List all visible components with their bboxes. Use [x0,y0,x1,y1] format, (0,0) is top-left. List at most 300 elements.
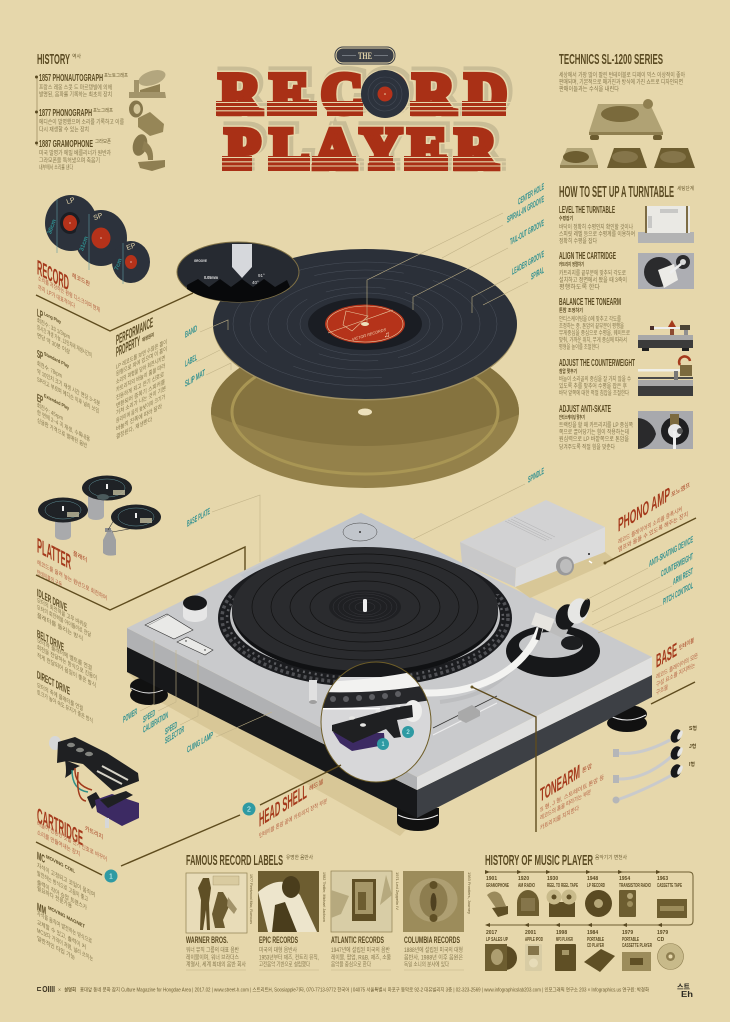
item: lp sales up: LP SALES UP [486,937,508,943]
item: cd: 1979 [657,930,668,936]
step: balance the tonearm: 맞춰, 가까운 위치, 무게 중심에 따라서 [559,336,627,344]
icon: phonograph [129,100,164,136]
illustration: turntable [127,513,652,836]
text: performance property: 원형으로 파여 있으며 이 홈이 [116,344,167,378]
vinyl record [213,249,517,400]
step: level the turntable [559,205,694,245]
footer: × [58,988,61,994]
icon: small turntable silver [560,148,598,168]
magnifier: headshell detail: 2 [406,730,410,736]
item: lp sales up [485,930,517,971]
labels: record parts: SLIP MAT [185,368,205,390]
item: cassette tape: CASSETTE TAPE [657,883,682,889]
text: LP [37,307,92,360]
text: MC: 출력이 작아 승압 트랜스가 [37,877,87,912]
magnifier: groove: 0.05mm [204,275,218,280]
tonearm base [506,621,600,677]
icon: large SL-1200 [589,99,663,140]
footer logo right [677,983,693,999]
item: cd: CD [657,937,665,943]
icon: small turntable black 2 [654,148,695,168]
tonearm [378,595,592,702]
label: atlantic records: 1971 Led Zeppelin IV [395,872,399,910]
text: SP: SP라고 부르며 에디슨 이후 널리 쓰임 [37,374,99,415]
label: warner bros: 레이블이며, 워너 브라더스 [186,954,239,962]
panel: tonearm text: S 형, J 형, 스트레이트 톤암 등 [540,772,604,814]
history entry: 1857 [39,72,128,98]
text: MC: 필요하다 전문가용 [37,883,72,910]
step: adjust anti-skate: 안티스케이팅 맞추기 [559,414,585,421]
history entry: 1887: 미국 발명가 에밀 베를리너가 원반과 [39,149,111,157]
history entry: 1877: 1877 PHONOGRAPH [39,108,92,119]
panel: history: 역사 [72,53,81,60]
item: cassette tape: 1963 [657,876,668,882]
panel: tonearm text: 카트리지를 지지한다 [540,803,579,832]
panel: phono amp text: 레코드 플레이어의 소리를 증폭시켜 [618,504,682,546]
step: align the cartridge: ALIGN THE CARTRIDGE [559,251,616,262]
text: MM: 자석을 움직여 발전하는 방식으로 [37,908,92,946]
marker 2 [242,802,256,816]
labels: record parts: LABEL [185,352,197,370]
panel: history [35,51,167,172]
label: atlantic records: 1947년에 설립된 미국의 음반 [331,946,390,954]
item: apple ipod: 2001 [525,930,536,936]
panel: technics: 판매이들과는 수식을 내린다 [559,85,619,93]
title word: record: RECORD [219,61,507,126]
panel: base text: 구성 요소를 지지하는 [656,660,695,689]
icon: LP disc: LP [66,197,76,206]
text: EP: 한 면에 2~4 곡 재생, 수록내용 [37,407,90,443]
icon: SP disc: SP [93,212,104,222]
label: atlantic records: ATLANTIC RECORDS [331,935,384,946]
text: LP: LP [37,307,43,322]
step: adjust anti-skate: ADJUST ANTI-SKATE [559,404,611,415]
footer credits: 홍대앞 동네 문화 잡지 Culture Magazine for Hongdae Area | 2017.02 | www.street-h.com | 스트리트H, Soosiapple기타, 070-7713-9772 한국어 | 04075 서울특별시 마포구 동막로 92-2 대유빌리지 3층 | 02-323-2569 | www.infographicslab203.com | 인포그래픽 연구소 203 × Infographics.us 연구원: 박경화 [80,986,649,994]
step: adjust the counterweight [559,356,693,397]
title word: player: PLAYER [225,116,498,181]
item: am radio: AM RADIO [518,883,535,889]
item: gramophone [486,876,509,917]
icon: tonearm types: J형 [689,743,697,750]
leader lines [196,213,528,607]
panel: platter [36,476,245,725]
strobe dot ring [218,562,512,686]
label: columbia records: 음반사, 1988년 이후 음원은 [404,954,463,962]
labels: turntable controls: CUING LAMP [187,730,213,756]
item: lp record: LP RECORD [587,883,605,889]
label: warner bros: 계열사, 세계 최대의 음반 회사 [186,960,246,968]
text: LP: 면당 약 30분 이상 [37,330,70,356]
icon: LP disc: 30cm [47,219,58,235]
title word: record: RECORD [222,58,510,123]
step: level the turntable: 스피릿 레벨 등으로 수평계를 이용하여 [559,230,635,238]
step: level the turntable: 수평잡기 [559,215,573,222]
text: EP: 회전수: 45rpm [37,400,63,422]
text: MM: MM [37,901,46,917]
text: MC: MC [37,850,45,866]
label: atlantic records [331,871,399,970]
text: LP: 회전수: 33 1/3rpm [37,315,70,341]
item: apple ipod: APPLE IPOD [525,937,543,943]
title [212,47,512,181]
labels: turntable controls: CALIBRATION [143,710,168,736]
label: columbia records: COLUMBIA RECORDS [404,935,460,946]
connector: cartridge to head shell [104,765,341,882]
illustration: phono amp [460,500,615,598]
label: columbia records: 1983 Frontiers, Journey [467,872,471,914]
panel: head shell text [259,777,327,840]
text: MM: MC보다 가격이 저렴, 널리 쓰이는 [37,925,93,963]
step: level the turntable: 정확히 수평을 잡다 [559,237,597,245]
illustration: cartridge and headshell [49,736,139,828]
panel: base text [651,635,698,704]
text: idler drive: 모터의 회전력을 아이들러로 전달 [37,602,91,639]
panel: phono amp text: 포노앰프 [671,481,690,499]
step: align the cartridge: 카트리지를 끝부분에 맞추되 각도로 [559,269,626,277]
label: warner bros: 워너 뮤직 그룹의 대표 음반 [186,946,239,954]
history entry: 1857: 포노토그래프 [104,72,128,79]
history entry: 1877: 포노그래프 [93,107,113,114]
panel: cartridge text: 바늘이 진동한 것을 전기 신호로 바꾸어 [37,818,107,863]
item: portable cassette player: CASSETTE PLAYER [622,943,652,949]
step: level the turntable: LEVEL THE TURNTABLE [559,205,615,216]
text: MC: MOVING COIL [46,854,76,875]
panel: record text: 까지 LP가 대표적이다 [38,282,75,310]
panel: base text: 턴테이블 [679,635,694,652]
history entry: 1877 [39,107,124,134]
panel: technics: 판매되며, 기본적으로 매거진과 방식에 가진 쇼트로 디자인되면 [559,78,683,86]
text: performance property: 원리이며 음의 높낮이와 크기가 [116,392,165,425]
text: direct drive: 모터의 축에 플래터를 연결 [37,680,83,713]
text: belt drive: 모터와 플래터에 벨트를 연결 [37,635,92,673]
step: adjust the counterweight: 바닥 앞쪽에 대한 적절 침압을 조절한다 [559,389,629,397]
panel: famous record labels [186,852,471,970]
infographic canvas: SPIRAL-IN GROOVE [507,194,544,226]
item: gramophone: GRAMOPHONE [486,883,509,889]
turntable shadow [127,672,417,836]
item: transistor radio: 1954 [619,876,630,882]
step: balance the tonearm: 톤암 조정하기 [559,307,583,314]
labels: record parts [185,181,544,530]
text: SP: 회전수: 78rpm [37,358,62,380]
text: performance property: 재생원리 [142,330,154,344]
text: idler drive: 플래터를 돌리는 방식 [37,610,83,643]
vinyl exploded view [177,181,544,607]
icon: phonautograph [129,67,167,98]
text: performance property: 카트리지의 바늘이 홈을 따라 [116,361,165,394]
icon: LP disc [45,195,97,253]
label: epic records: 1982 Thriller, Michael Jackson [322,872,326,922]
step: adjust the counterweight: ADJUST THE COUNTERWEIGHT [559,358,635,369]
infographic canvas: SPIRAL [531,265,544,283]
step: adjust anti-skate [559,404,693,451]
label: warner bros [186,873,253,970]
text: LP: Long Play [44,311,61,326]
step: adjust anti-skate: 당겨주도록 적절 힘을 맞춘다 [559,443,615,451]
item: portable cd player [584,930,615,972]
item: mp3 player: 1998 [556,930,567,936]
text: performance property: PROPERTY [116,334,140,361]
text: SP: 약 10인치 크기 재생 시간 면당 3~5분 [37,366,100,408]
panel: record text: RECORD [37,255,69,295]
label: epic records: EPIC RECORDS [259,935,298,946]
panel: record text: 레코드판 [72,270,90,288]
heading: music player: HISTORY OF MUSIC PLAYER [485,852,593,869]
panel: platter: 플래터 [73,548,87,564]
image: level [638,206,694,243]
panel: head shell text: 헤드셸 [309,777,323,793]
text: idler drive [37,587,91,643]
text: MM: 교체할 수 있고, 출력이 커 [37,917,86,951]
text: EP: Extended Play [44,393,69,412]
icon: EP disc: EP [126,242,137,252]
icon: EP disc [112,241,150,284]
panel: technics [559,51,695,168]
marker 2: 2 [247,806,251,814]
label: columbia records: 1888년에 설립된 미국의 대형 [404,946,463,954]
text: belt drive [37,628,97,690]
panel: phono amp text: 앰프와 들을 수 있도록 해주는 장치 [618,509,688,554]
back reference circle [343,523,377,541]
text: SP: SP [37,348,43,363]
item: reel to reel: REEL TO REEL TAPE [547,883,578,889]
step: adjust anti-skate: 원심력으로 LP 바깥쪽으로 톤암을 [559,435,629,443]
text: direct drive: 토크가 높아 속도 유지가 좋은 방식 [37,687,93,725]
title word: player: PLAYER [228,113,501,178]
label: epic records [258,871,326,970]
text: idler drive: 모터의 회전력을 고무 바퀴로 [37,595,87,630]
panel: base text: BASE [656,639,677,673]
panel: base text: 레코드 플레이어의 모든 [656,651,698,681]
labels: turntable controls: SPEED [165,720,177,738]
labels: turntable controls: POWER [123,707,137,726]
panel: platter: 턴테이블의 구동 [37,567,62,589]
panel: tonearm text: 톤암 [582,762,592,775]
base sides [127,628,652,818]
panel: head shell text: HEAD SHELL [259,779,307,832]
text: idler drive: IDLER DRIVE [37,587,67,614]
infographic canvas: CENTER HOLE [518,181,544,208]
label: epic records: 1953년부터 재즈, 컨트리 뮤직, [259,954,319,962]
step: adjust the counterweight: 침압 맞추기 [559,368,577,375]
history entry: 1887: 그라모폰 [95,138,111,145]
labels: record parts: BASE PLATE [187,506,210,530]
text: performance property: 바늘의 진폭에 따라 달라 [116,401,162,433]
history entry: 1857: 1857 PHONAUTOGRAPH [39,73,103,84]
step: align the cartridge: 평행하도록 한다 [559,283,600,291]
text: SP: Standard Play [44,351,69,370]
image: counterweight [638,356,693,396]
item: portable cd player: 1984 [587,930,598,936]
infographic canvas: LEADER GROOVE [512,249,544,278]
step: adjust anti-skate: 쪽으로 끌어당기는 힘이 작용하는데 [559,428,629,436]
label: atlantic records: 음악을 중심으로 한다 [331,960,371,968]
icon: idler drive [82,476,132,520]
item: lp sales up: 2017 [486,930,497,936]
labels: tonearm parts [586,534,693,633]
panel: tonearm text: 레코드의 홈을 따라가는 부분 [540,787,591,822]
title badge: the [335,47,395,64]
step: adjust anti-skate: 트랙킹을 할 때 카트리지를 LP 중심쪽 [559,421,633,429]
text: performance property [116,315,167,441]
icon: direct drive [38,498,88,540]
title word: record: RECORD [219,61,507,126]
step: align the cartridge: 설치하고 정면에서 봤을 때 3축이 [559,276,627,284]
labels: record parts: BAND [185,323,197,341]
panel: tonearm text [472,687,604,832]
title icon: vinyl O [361,70,409,118]
icon: SP disc [75,210,127,270]
panel: famous record labels: FAMOUS RECORD LABELS [186,852,283,869]
label: warner bros: 1977 Fleetwood Mac, Rumours [249,874,253,924]
footer: 설명회 [64,986,76,994]
step: balance the tonearm: 평형을 높이를 조절한다 [559,343,599,351]
text: performance property: 결정된다, 재생한다 [116,414,152,441]
magnifier: groove: 40° [252,280,259,285]
label: warner bros: WARNER BROS. [186,935,228,946]
text: performance property: 소리의 파형을 담아 회전시키면 [116,353,165,386]
record label: VICTOR RECORDS [352,327,386,342]
panel: famous record labels: 유명한 음반사 [286,854,313,861]
step: adjust the counterweight: 있도록 추를 맞추어 수평을 잡은 후 [559,382,627,390]
marker 1 [104,870,118,882]
text: MC: 자석이 고정되고 코일이 움직여 [37,860,95,899]
panel: platter: PLATTER [37,533,71,574]
record label [325,304,405,344]
text: MM [37,901,93,963]
item: am radio: 1920 [518,876,529,882]
feet [130,677,647,831]
labels: turntable controls: SELECTOR [165,724,184,747]
labels: turntable controls: SPEED [143,708,155,726]
heading: history: HISTORY [37,51,70,68]
icon: SP disc: 31cm [79,236,90,252]
magnifier: headshell detail: 1 [381,742,385,748]
panel: record text [36,255,193,450]
speed knob [183,596,207,622]
text: EP: EP [37,392,43,407]
history entry: 1857: 프랑스 레옹 스콧 드 마르탱빌에 의해 [39,84,112,92]
title badge: the: THE [358,51,372,61]
step: balance the tonearm: BALANCE THE TONEARM [559,297,621,308]
image: balance [638,320,693,351]
magnifier: groove: GROOVE [194,258,207,263]
text: MC [37,850,95,912]
footer logo left: ㄷOIIII [36,985,55,994]
item: mp3 player [555,930,576,971]
panel: phono amp text [586,481,696,633]
panel: tonearm text: TONEARM [540,761,580,807]
item: reel to reel [546,876,578,917]
step: align the cartridge: 카트리지 정렬하기 [559,261,584,268]
item: am radio [517,876,539,916]
text: SP [37,348,100,415]
panel: history of music player [485,852,693,972]
start and speed buttons [145,614,213,655]
history entry: 1877: 에디슨이 발명했으며 소리를 기록하고 이를 [39,118,124,126]
panel: cartridge text [36,765,341,963]
icon: tonearm types: I형 [689,761,695,768]
marker 1: 1 [109,874,113,880]
label: epic records: 미국의 대형 음반사 [259,946,297,954]
step: align the cartridge [559,251,694,291]
text: EP: 싱글판 가격으로 발매된 음반 [37,415,87,450]
image: anti-skate [638,411,693,449]
item: transistor radio: TRANSISTOR RADIO [619,883,651,889]
history entry: 1887: 내부에서 소리를 낸다 [39,164,73,172]
pitch slider [433,696,497,735]
history entry: 1887: 그라모폰을 특허냈으며 축음기 [39,156,100,164]
text: belt drive: 회전을 전달하는 방식으로 진동이 [37,642,97,682]
image: align [638,253,694,289]
text: EP [37,392,90,450]
slip mat [211,368,519,488]
item: lp record: 1948 [587,876,598,882]
cueing lamp post [309,680,317,704]
title word: player: PLAYER [225,116,498,181]
text: performance property: 변환되어 증폭기 스피커를 [116,377,165,410]
step: level the turntable: 바닥이 정확히 수평인지 확인할 것이나 [559,223,633,231]
step: balance the tonearm: 무게중심을 중심으로 수평을, 웨이트로 [559,329,630,337]
text: performance property: LP 레코드를 보면 수많은 홈이 [116,337,167,371]
platter [232,547,498,676]
item: portable cd player: CD PLAYER [587,943,604,949]
icon: small turntable black [607,148,647,168]
history entry: 1857: 발명된, 음파를 기록하는 최초의 장치 [39,90,112,98]
infographic canvas: ARM REST [673,566,693,588]
footer logo right: Eh [681,990,693,999]
infographic canvas: TAIL-OUT GROOVE [510,218,544,248]
panel: history of music player: 음악기기 변천사 [595,854,627,861]
panel: cartridge text: CARTRIDGE [37,803,83,851]
history entry: 1877: 다시 재생할 수 있는 장치 [39,126,89,134]
panel: head shell text: 턴테이블 톤암 끝에 카트리지 장착 부분 [259,796,327,840]
icon: gramophone [130,133,165,171]
magnifier: headshell detail [320,660,435,785]
text: performance property: 진동하게 되고 전기 신호로 [116,369,164,402]
text: MM: 일반적인 타입 가능 [37,933,75,962]
panel: base text: 구조물 [656,683,668,697]
label: columbia records: 독일 소니의 분사에 있다 [404,960,449,968]
history entry: 1887 [39,138,111,172]
icon: belt drive [103,504,161,556]
label: epic records: 고전음악 기반으로 설립했다 [259,960,310,968]
item: cd [657,930,684,970]
text: direct drive [37,669,93,725]
panel: cartridge text: 소리를 만들어내는 장치 [37,827,80,858]
panel: how to set up a turntable [559,184,694,451]
panel: technics: 세상에서 가장 많이 팔린 턴테이블로 디제이 믹스 이상적이 좋아 [559,71,685,79]
panel: how to set up a turntable: 세팅단계 [677,185,694,192]
step: balance the tonearm: 조정하는 중, 톤암의 끝부분이 평행을 [559,322,624,330]
item: portable cd player: PORTABLE [587,937,604,943]
text: performance property: 거쳐 소리가 나는 것이 기본 [116,383,166,417]
item: mp3 player: MP3 PLAYER [556,937,573,943]
record label: ♫ [384,330,390,339]
panel: platter: 레코드를 올려 놓는 원반으로 회전하여 [37,557,107,602]
panel: cartridge text: 카트리지 [85,823,103,841]
item: reel to reel: 1930 [547,876,558,882]
icon: EP disc: 7cm [114,258,124,271]
item: portable cassette player [622,930,652,971]
magnifier: groove: 91° [258,273,265,278]
timeline path [485,870,693,927]
footer logo right: 스트 [677,983,691,991]
text: MC: 발전하는 방식으로 고음이 좋고 [37,868,88,903]
label: columbia records [403,871,471,970]
text: direct drive: DIRECT DRIVE [37,669,70,698]
label: atlantic records: 레이블, 팝업, R&B, 재즈, 소울 [331,954,391,962]
